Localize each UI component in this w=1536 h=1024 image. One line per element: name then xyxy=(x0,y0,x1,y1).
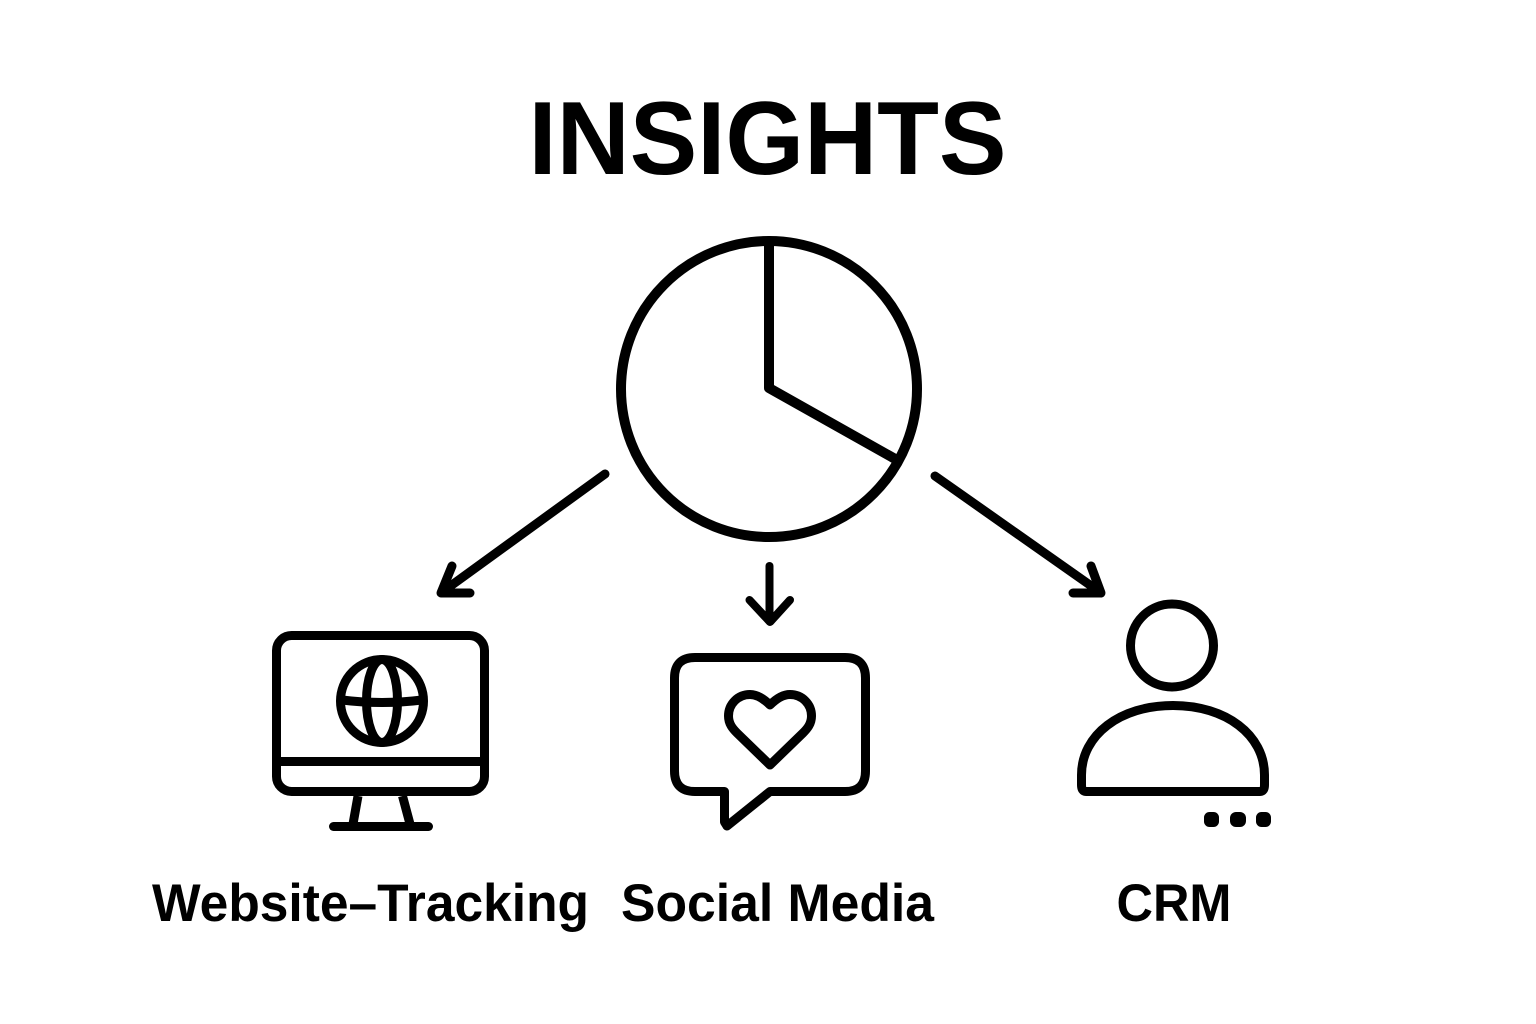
title: INSIGHTS xyxy=(528,81,1006,197)
arrow: to CRM xyxy=(935,476,1101,593)
heart xyxy=(728,694,812,765)
icon: pie chart xyxy=(621,241,917,537)
arrow: to website tracking xyxy=(441,474,605,593)
label: Social Media: Social Media xyxy=(621,874,935,933)
globe xyxy=(340,660,424,742)
icon: CRM person xyxy=(1082,604,1271,827)
arrow: to social media xyxy=(750,566,790,622)
icon: speech bubble with heart xyxy=(674,658,866,826)
dots xyxy=(1204,812,1271,827)
icon: website monitor with globe xyxy=(276,636,484,826)
label: CRM: CRM xyxy=(1116,874,1232,933)
label: Website-Tracking: Website–Tracking xyxy=(152,874,589,933)
